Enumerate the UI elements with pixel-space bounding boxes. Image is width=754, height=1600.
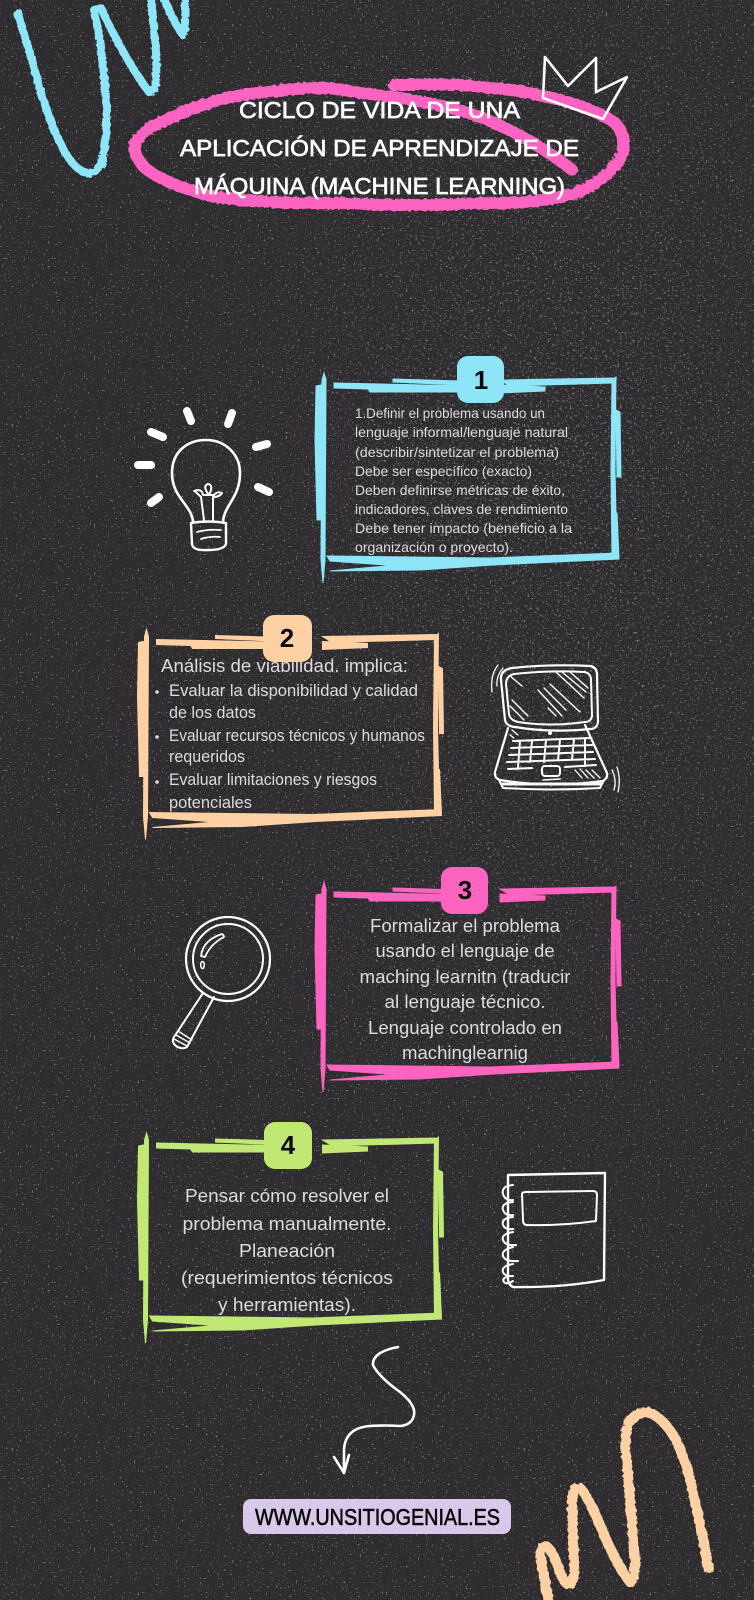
frame: peach <box>138 630 444 840</box>
text: step 1: Deben definirse métricas de éxito, <box>355 482 565 498</box>
text: step 1: (describir/sintetizar el problema) <box>355 444 559 460</box>
step 2 panel <box>138 615 444 840</box>
icon: laptop <box>492 665 619 792</box>
icon: magnifying glass <box>173 917 270 1048</box>
text: step 3: al lenguaje técnico. <box>384 992 546 1012</box>
step 1 panel <box>315 356 621 583</box>
text: step 3: Lenguaje controlado en <box>368 1018 562 1038</box>
text: step 4 <box>181 1185 393 1315</box>
text: step 1: indicadores, claves de rendimiento <box>355 501 568 517</box>
title text: MÁQUINA (MACHINE LEARNING) <box>194 173 565 199</box>
frame: green <box>138 1133 444 1343</box>
title text: CICLO DE VIDA DE UNA <box>239 97 521 123</box>
icon: crown <box>543 57 627 119</box>
text: step 1: organización o proyecto). <box>355 539 513 555</box>
text: step 4: (requerimientos técnicos <box>181 1267 393 1288</box>
title text: APLICACIÓN DE APRENDIZAJE DE <box>180 135 579 161</box>
arrow <box>334 1347 414 1473</box>
text: step 2: Evaluar la disponibilidad y calidad <box>169 682 418 700</box>
website label: WWW.UNSITIOGENIAL.ES <box>255 1504 500 1530</box>
text: step 2: requeridos <box>169 748 245 766</box>
text: step 2: potenciales <box>169 794 252 812</box>
text: step 1 <box>355 405 572 555</box>
badge 2 <box>263 615 312 662</box>
badge 4: 4 <box>281 1130 296 1160</box>
text: step 4: y herramientas). <box>218 1294 356 1315</box>
text: step 4: problema manualmente. <box>182 1213 392 1234</box>
text: step 3: maching learnitn (traducir <box>360 967 571 987</box>
icon: light bulb <box>138 411 269 550</box>
website label <box>243 1499 511 1534</box>
text: step 1: lenguaje informal/lenguaje natural <box>355 424 568 440</box>
frame: cyan <box>315 373 621 583</box>
text: step 3: Formalizar el problema <box>370 916 561 936</box>
badge 4 <box>264 1122 312 1169</box>
text: step 2: de los datos <box>169 704 256 722</box>
text: step 2: Evaluar limitaciones y riesgos <box>169 771 377 789</box>
badge 1: 1 <box>474 365 488 395</box>
text: step 3: usando el lenguaje de <box>376 941 554 961</box>
pink brush ellipse <box>135 84 624 205</box>
badge 3 <box>441 867 488 914</box>
step 3 panel <box>315 867 621 1092</box>
text: step 1: Debe tener impacto (beneficio a la <box>355 520 572 536</box>
text: step 1: 1.Definir el problema usando un <box>355 405 545 421</box>
title text <box>180 97 579 199</box>
step 4 panel <box>138 1122 444 1343</box>
text: step 4: Planeación <box>239 1240 335 1261</box>
decorative cyan scribble <box>18 0 185 173</box>
badge 3: 3 <box>458 875 472 905</box>
text: step 1: Debe ser específico (exacto) <box>355 463 532 479</box>
decorative peach scribble <box>541 1412 709 1600</box>
icon: notebook <box>503 1173 605 1287</box>
text: step 4: Pensar cómo resolver el <box>185 1185 389 1206</box>
badge 1 <box>457 356 504 403</box>
badge 2: 2 <box>280 623 294 653</box>
title with pink brush ellipse <box>135 57 627 205</box>
text: step 2: Análisis de viabilidad. implica: <box>161 656 408 676</box>
frame: pink <box>315 882 621 1092</box>
text: step 2 <box>155 656 425 812</box>
text: step 3 <box>360 916 571 1063</box>
text: step 3: machinglearnig <box>402 1043 528 1063</box>
text: step 2: Evaluar recursos técnicos y humanos <box>169 727 425 745</box>
